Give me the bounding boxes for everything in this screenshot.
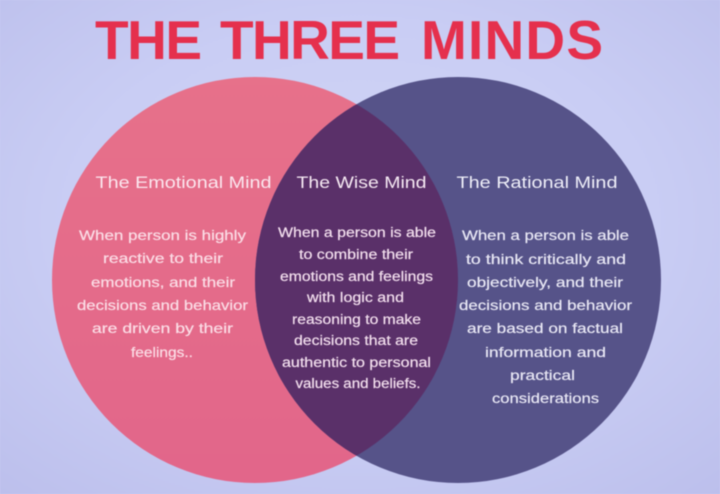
text: emotional mind description: reactive to their xyxy=(103,250,223,266)
heading: the wise mind: The Wise Mind xyxy=(296,173,426,192)
text: wise mind description: to combine their xyxy=(299,247,414,262)
circle: rational mind xyxy=(255,77,661,483)
heading: the rational mind: The Rational Mind xyxy=(456,173,618,192)
circle: emotional mind xyxy=(52,77,458,483)
text: wise mind description xyxy=(278,225,436,391)
text: emotional mind description: When person is highly xyxy=(79,227,246,243)
text: emotional mind description: are driven by their xyxy=(92,320,233,336)
overlap: wise mind xyxy=(254,104,458,456)
text: rational mind description: information and xyxy=(485,344,606,360)
text: rational mind description: are based on factual xyxy=(467,320,623,336)
text: wise mind description: authentic to personal xyxy=(282,355,431,370)
text: wise mind description: reasoning to make xyxy=(292,312,421,327)
text: rational mind description: to think critically and xyxy=(466,251,626,267)
text: emotional mind description: decisions and behavior xyxy=(77,297,248,313)
text: emotional mind description: emotions, and their xyxy=(91,274,235,290)
text: rational mind description: considerations xyxy=(492,390,599,406)
text: wise mind description: with logic and xyxy=(306,290,404,305)
text: rational mind description: objectively, and their xyxy=(467,274,623,290)
text: emotional mind description: feelings.. xyxy=(131,344,193,360)
text: wise mind description: emotions and feelings xyxy=(280,269,433,284)
title xyxy=(95,9,603,71)
text: rational mind description: decisions and behavior xyxy=(459,297,632,313)
title: MINDS xyxy=(421,9,603,71)
text: rational mind description: practical xyxy=(510,367,575,383)
text: wise mind description: decisions that are xyxy=(294,333,418,348)
text: emotional mind description xyxy=(77,227,248,360)
heading: the emotional mind: The Emotional Mind xyxy=(96,173,272,192)
text: rational mind description: When a person is able xyxy=(462,227,629,243)
text: wise mind description: values and beliefs. xyxy=(296,376,420,391)
title: THE xyxy=(95,9,202,71)
text: wise mind description: When a person is able xyxy=(278,225,436,240)
text: rational mind description xyxy=(459,227,632,406)
title: THREE xyxy=(220,9,400,71)
